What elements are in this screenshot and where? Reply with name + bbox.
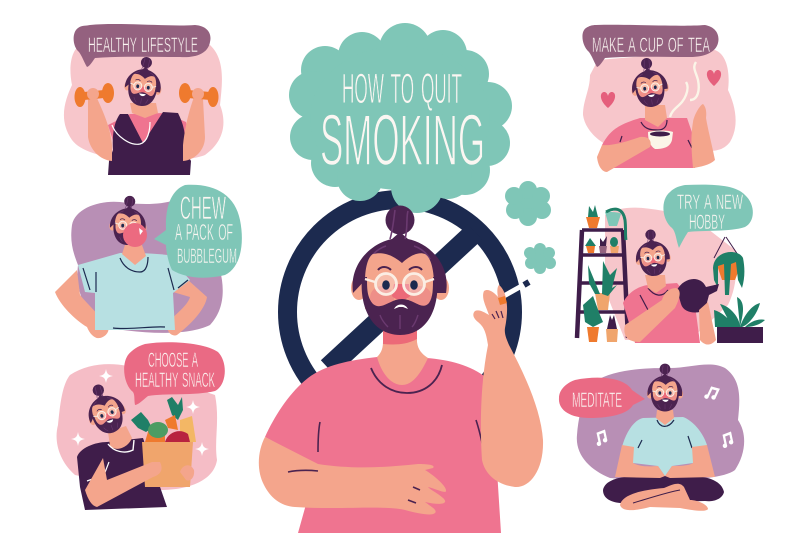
- panel: chew bubblegum: [55, 185, 242, 338]
- label: [677, 191, 743, 234]
- panel: healthy lifestyle: [64, 24, 223, 175]
- tea cup: [648, 130, 673, 149]
- hearts: [601, 70, 721, 108]
- smoke puffs: [505, 181, 556, 274]
- blob background: [71, 200, 223, 333]
- label: CHEW: [180, 190, 226, 226]
- blob background: [64, 39, 223, 161]
- neck: [656, 410, 674, 425]
- tank top figure: [88, 97, 205, 175]
- label: HOBBY: [689, 211, 725, 234]
- speech bubble: [559, 378, 645, 418]
- panel: healthy snack: [57, 342, 225, 510]
- label: [175, 190, 237, 268]
- title text: [320, 65, 485, 181]
- central figure: no-smoking sign and man: SMOKING: [320, 101, 485, 181]
- arms: [597, 104, 715, 172]
- main head with sad face: [351, 206, 449, 335]
- title cloud: [289, 23, 512, 213]
- arms: [55, 270, 207, 338]
- left forearm and hand: [259, 437, 446, 514]
- panel: cup of tea: [582, 25, 736, 172]
- music notes: [594, 384, 734, 448]
- blob background: [605, 208, 736, 340]
- shirt: [77, 426, 167, 510]
- speech bubble: [663, 185, 753, 248]
- head: [627, 55, 671, 109]
- shirt: [602, 118, 698, 168]
- dumbbell left: [74, 83, 114, 107]
- central figure: no-smoking sign and man: HOW TO QUIT: [342, 65, 462, 113]
- paper bag: [142, 442, 193, 487]
- neck: [645, 275, 666, 293]
- right arm and hand with cigarette: [473, 282, 543, 487]
- central figure: no-smoking sign and man: [259, 23, 556, 533]
- speech bubble: [154, 185, 242, 278]
- head: [632, 228, 672, 278]
- dumbbell right: [179, 83, 218, 107]
- infographic: how to quit smoking: BUBBLEGUM: [177, 245, 237, 268]
- watering can: [677, 279, 719, 312]
- neck: [377, 325, 428, 385]
- blob background: [577, 364, 744, 480]
- panel: healthy snack: HEALTHY SNACK: [135, 369, 215, 392]
- sparkles: [71, 369, 209, 456]
- plant shelf: [577, 205, 628, 342]
- blob background: [57, 364, 217, 490]
- panel: meditate: MEDITATE: [572, 389, 622, 412]
- shirt: [622, 417, 707, 476]
- speech bubble: [582, 25, 718, 67]
- shirt: [78, 253, 190, 330]
- panel: try a new hobby: [577, 185, 765, 345]
- neck: [645, 105, 667, 127]
- label: [135, 349, 215, 392]
- steam: [670, 62, 699, 117]
- speech bubble: [124, 342, 225, 405]
- head: [78, 378, 132, 439]
- potted plant: [714, 297, 765, 343]
- arms: [85, 458, 194, 507]
- hanging plant: [713, 237, 744, 295]
- vegetables: [131, 397, 196, 442]
- speech bubble: [74, 24, 210, 67]
- label: CHOOSE A: [148, 349, 198, 372]
- panel: meditate: [559, 364, 744, 511]
- head with gum bubble: [108, 195, 149, 265]
- no-smoking ring: [288, 200, 512, 424]
- label: TRY A NEW: [677, 191, 743, 214]
- arms: [615, 445, 715, 478]
- label: HEALTHY LIFESTYLE: [88, 34, 198, 57]
- panel: chew bubblegum: A PACK OF: [175, 219, 233, 245]
- head: [647, 364, 683, 412]
- shirt: [623, 283, 700, 343]
- arms: [624, 288, 716, 345]
- blob background: [583, 50, 736, 151]
- shirt: [265, 357, 501, 533]
- head: [122, 54, 166, 108]
- crossed legs: [603, 476, 724, 511]
